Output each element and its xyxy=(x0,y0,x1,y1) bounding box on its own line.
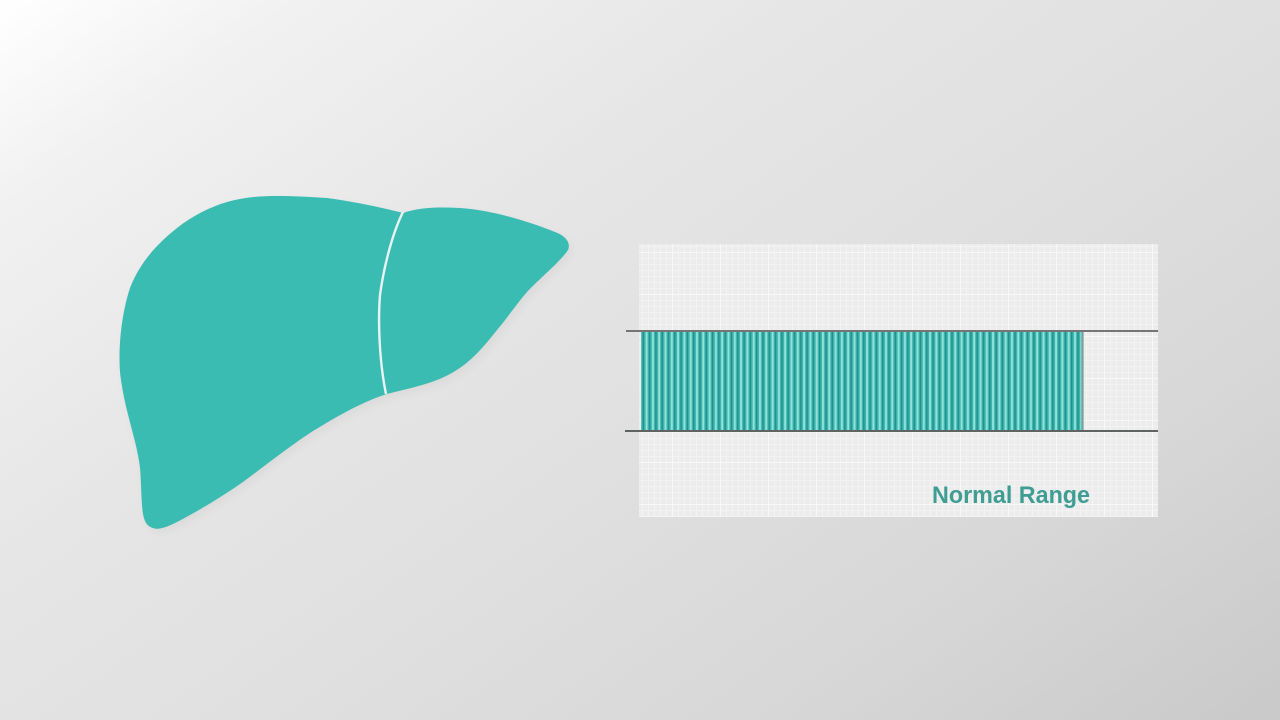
upper range line xyxy=(626,330,1158,332)
lower range line xyxy=(625,430,1158,432)
panel: normal range gauge xyxy=(625,244,1158,517)
bar: normal range fill xyxy=(641,332,1083,430)
liver lobe divider xyxy=(379,212,403,394)
gauge background grid xyxy=(639,244,1158,517)
label: normal range: Normal Range xyxy=(932,482,1090,509)
bar end shadow xyxy=(1081,332,1084,430)
icon: liver xyxy=(119,196,572,533)
